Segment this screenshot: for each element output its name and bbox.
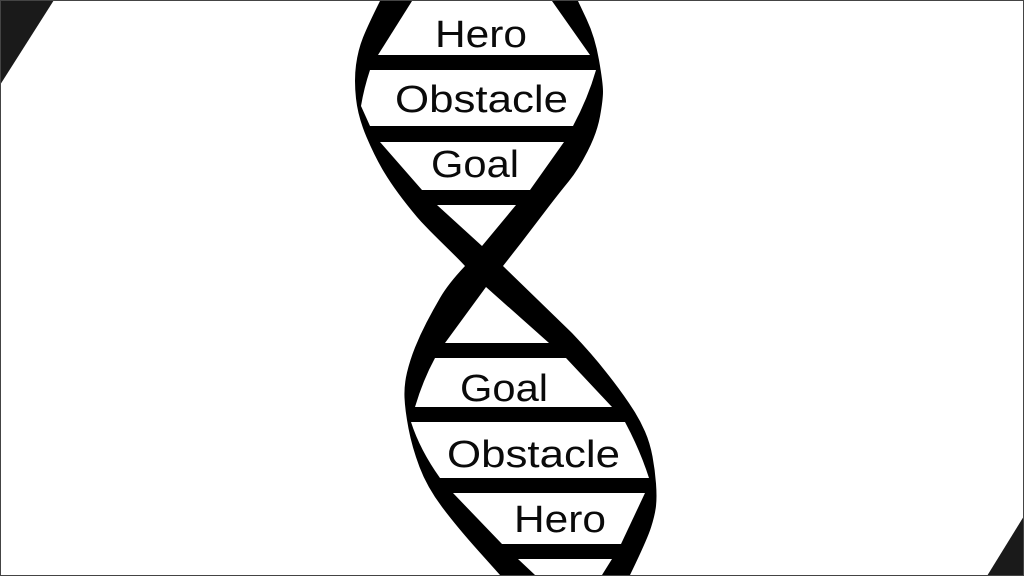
label: Goal (bottom): Goal (460, 368, 548, 410)
rung gap 4 (437, 205, 516, 246)
helix strand silhouette (355, 1, 656, 575)
rung gap 7 (411, 422, 649, 478)
DNA helix (355, 1, 656, 575)
label: Goal (top): Goal (431, 144, 519, 186)
rung gap 3 (380, 142, 564, 190)
label: Hero (bottom): Hero (514, 499, 606, 541)
label: Obstacle (bottom): Obstacle (447, 434, 620, 476)
rung gap 1 (378, 1, 590, 55)
corner accent: top left (0, 0, 54, 85)
corner accent: bottom right (987, 516, 1024, 576)
rung gap 6 (415, 358, 612, 407)
rung gap 5 (445, 287, 549, 343)
rung gap 2 (361, 70, 596, 126)
label: Hero (top): Hero (435, 14, 527, 56)
rung gap 8 (453, 493, 645, 544)
rung gap 9 (518, 559, 612, 575)
label: Obstacle (top): Obstacle (395, 79, 568, 121)
